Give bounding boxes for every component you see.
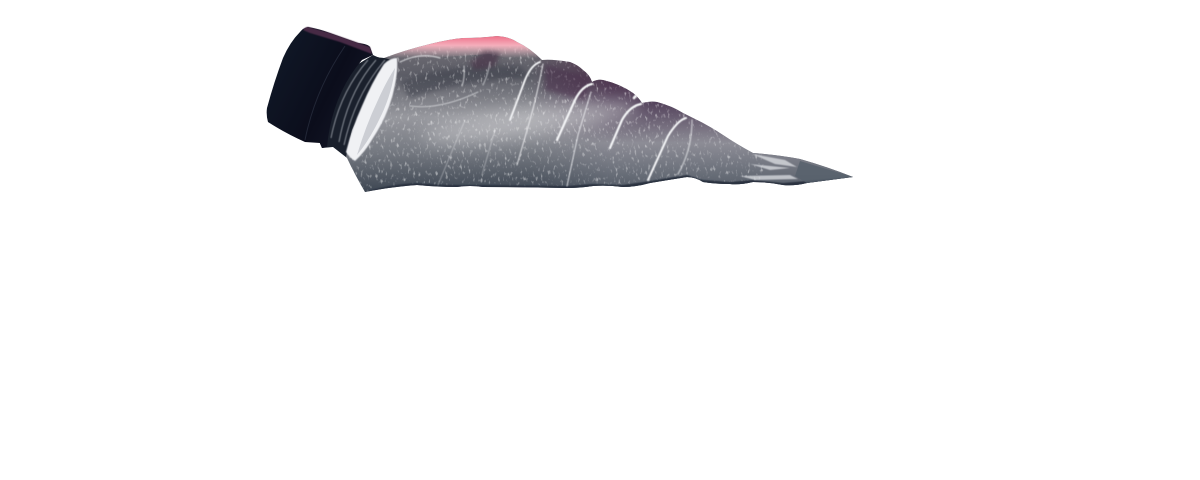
cap ridge	[305, 46, 345, 140]
illustration: crushed plastic bottle	[266, 26, 853, 192]
neck threads	[331, 60, 385, 145]
bottle shoulder white rim	[346, 58, 397, 161]
cap purple top edge	[303, 27, 372, 54]
purple creases	[470, 51, 500, 70]
crushed tip shading	[540, 60, 853, 188]
tip end highlights	[740, 154, 798, 180]
speckled plastic texture	[349, 46, 764, 192]
bottle cap	[267, 27, 373, 148]
bottle body base	[320, 30, 860, 195]
pale mist through centre of bottle	[419, 93, 641, 151]
pink top glow	[388, 36, 538, 58]
bottle neck	[320, 55, 391, 157]
rim inner glass	[357, 68, 395, 155]
lower edge shadow	[364, 174, 852, 192]
white crease lines	[400, 56, 692, 186]
dark upper band	[400, 65, 530, 98]
